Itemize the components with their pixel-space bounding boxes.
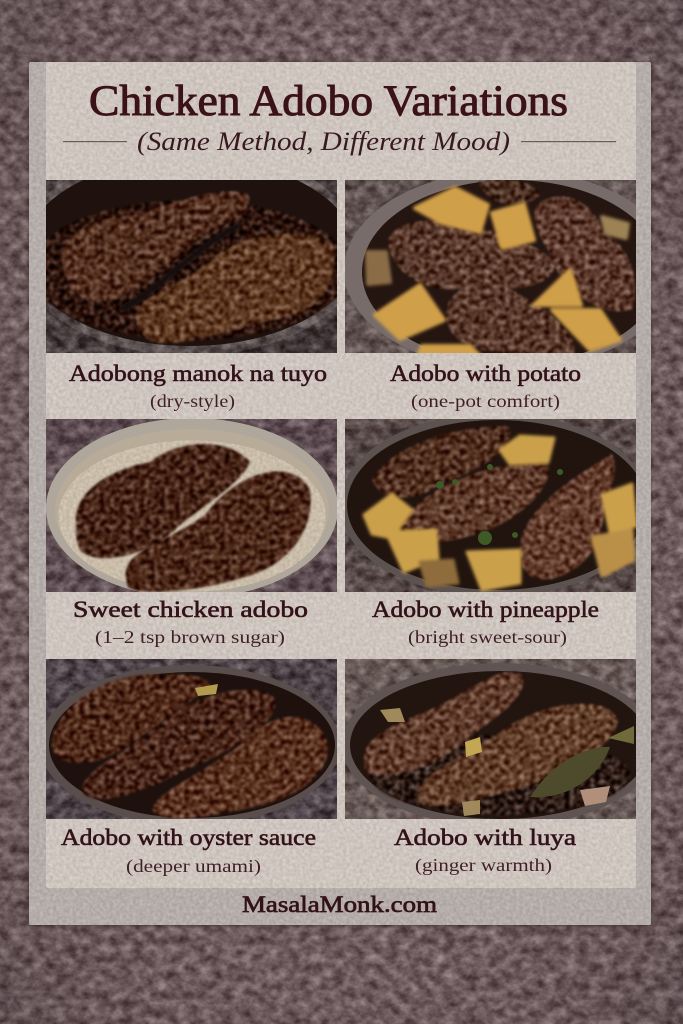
caption: sweet: (1–2 tsp brown sugar) — [95, 627, 285, 648]
caption: pineapple: Adobo with pineapple — [372, 597, 599, 622]
caption: dry-style: Adobong manok na tuyo — [69, 361, 327, 386]
shadow between pieces — [120, 225, 240, 310]
caption: sweet: Sweet chicken adobo — [73, 597, 308, 622]
caption: potato — [390, 361, 581, 412]
pineapple chunks — [364, 436, 636, 590]
caption: sweet — [73, 597, 308, 648]
photo: adobo with luya — [345, 659, 636, 819]
chicken pieces — [52, 674, 328, 818]
caption: dry-style — [69, 361, 327, 412]
panel: outer card texture — [29, 62, 651, 925]
bay leaf — [530, 747, 610, 797]
ginger slices — [380, 708, 634, 816]
panel: outer card — [29, 62, 651, 925]
panel: inner card — [46, 62, 636, 888]
photo: dry-style adobo — [46, 180, 337, 353]
subtitle with rules: (Same Method, Different Mood) — [137, 127, 510, 156]
rice — [58, 440, 326, 592]
chicken pieces — [364, 672, 618, 806]
caption: oyster sauce — [61, 825, 316, 877]
photo: sweet chicken adobo on rice — [46, 418, 338, 598]
footer website: MasalaMonk.com — [242, 892, 437, 917]
chicken pieces — [76, 444, 311, 592]
herb flecks — [436, 464, 563, 545]
potato chunks — [367, 188, 628, 356]
chicken pieces — [62, 191, 334, 343]
caption: oyster sauce: Adobo with oyster sauce — [61, 825, 316, 850]
caption: potato: (one-pot comfort) — [411, 391, 560, 412]
caption: luya: (ginger warmth) — [415, 855, 552, 876]
caption: potato: Adobo with potato — [390, 361, 581, 386]
photo: adobo with oyster sauce — [40, 659, 340, 825]
caption: luya: Adobo with luya — [394, 825, 576, 850]
chicken pieces — [388, 179, 635, 358]
photo: adobo with potato — [345, 180, 636, 353]
caption: pineapple — [372, 597, 599, 648]
caption: dry-style: (dry-style) — [150, 391, 235, 412]
chicken pieces — [372, 426, 615, 580]
caption: luya — [394, 825, 576, 876]
title: Chicken Adobo Variations — [89, 78, 568, 125]
caption: pineapple: (bright sweet-sour) — [408, 627, 567, 648]
photo: adobo with pineapple — [345, 419, 636, 592]
caption: oyster sauce: (deeper umami) — [126, 856, 261, 877]
